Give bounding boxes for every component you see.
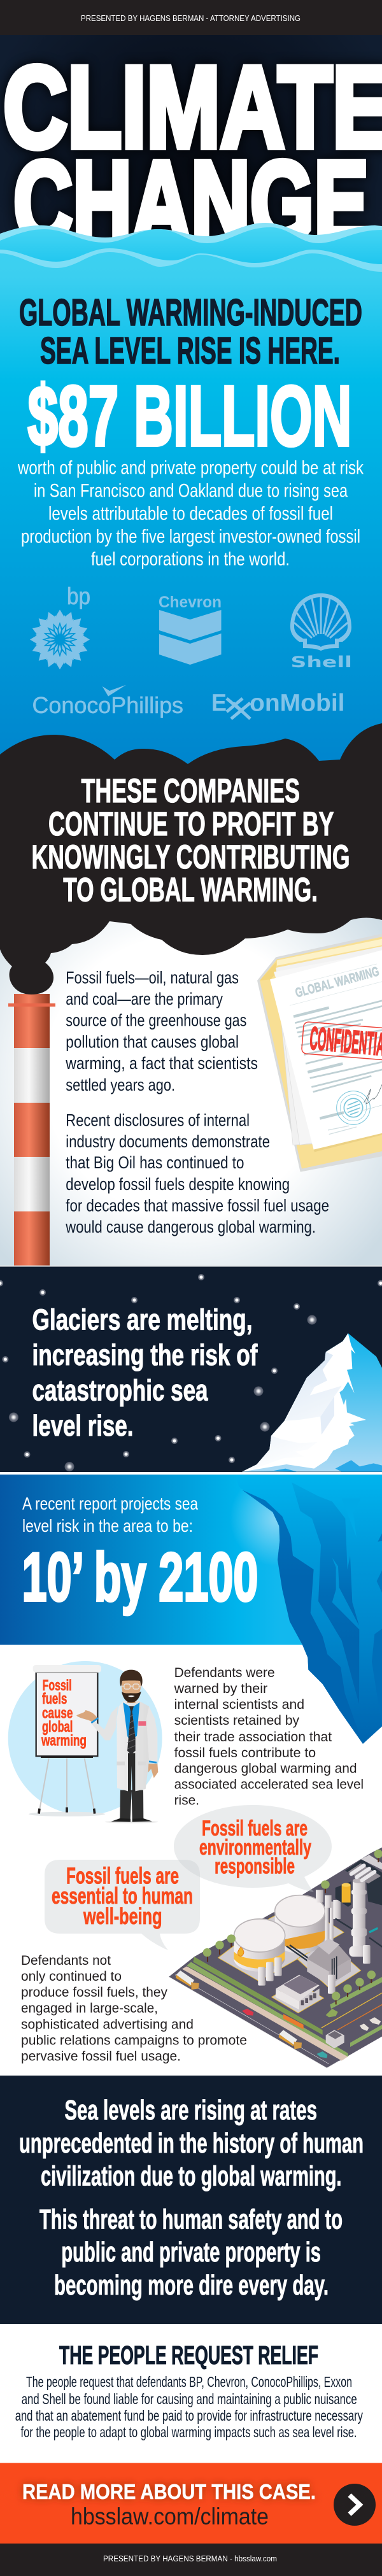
top bar text: PRESENTED BY HAGENS BERMAN - ATTORNEY ADVERTISING: [81, 13, 301, 23]
stars: [0, 1273, 382, 1472]
smoke cloud: [0, 723, 382, 994]
text block: recent disclosures: that Big Oil has continued to: [66, 1153, 244, 1172]
small silos: [258, 1945, 371, 1994]
heading shadow: READ MORE ABOUT THIS CASE.: [22, 2480, 316, 2503]
text block: fossil fuels: [65, 968, 258, 1094]
trees: [203, 1850, 382, 2009]
heading: glaciers melting: [32, 1303, 258, 1442]
heading: read more: READ MORE ABOUT THIS CASE.: [22, 2480, 316, 2503]
panel: sea levels rising: [0, 2076, 382, 2324]
text block: defendants warned: their trade association that: [174, 1730, 332, 1744]
text block: recent disclosures: for decades that massive fossil fuel usage: [66, 1196, 329, 1215]
text block: recent report: level risk in the area to be:: [22, 1516, 193, 1536]
footer: [0, 2544, 382, 2576]
scientist figure: [76, 1670, 158, 1822]
bubble text: essential to human: [52, 1883, 193, 1909]
text block: recent report: [22, 1494, 198, 1536]
document lines: [290, 964, 382, 1135]
flip chart text: fuels: [42, 1690, 67, 1708]
text block: fossil fuels: pollution that causes global: [66, 1033, 239, 1052]
speech bubble: essential to well-being: [45, 1860, 200, 1950]
logo: bp: [29, 583, 91, 670]
logo: bp: bp: [67, 583, 90, 609]
text block: defendants warned: associated accelerated sea level: [174, 1778, 364, 1792]
waves: [0, 223, 382, 770]
illustration: refinery: [169, 1846, 382, 2068]
footer text: PRESENTED BY HAGENS BERMAN - hbsslaw.com: [103, 2554, 277, 2563]
statement: threat to safety: [39, 2204, 343, 2301]
iceberg above water: [242, 1333, 382, 1472]
text block: advertising campaigns: pervasive fossil fuel usage.: [21, 2049, 181, 2064]
flip chart text: warming: [41, 1732, 87, 1750]
text block: defendants warned: rise.: [174, 1793, 199, 1808]
top bar: [0, 0, 382, 35]
text block: advertising campaigns: public relations campaigns to promote: [21, 2034, 247, 2048]
text block: advertising campaigns: only continued to: [21, 1969, 122, 1984]
heading: glaciers melting: increasing the risk of: [32, 1338, 258, 1371]
text block: advertising campaigns: engaged in large-scale,: [21, 2001, 158, 2016]
sign and gatehouse: [283, 2014, 344, 2048]
text block: recent disclosures: [65, 1110, 329, 1236]
bubble text: Fossil fuels are: [202, 1816, 308, 1841]
text block: recent disclosures: Recent disclosures of internal: [66, 1110, 250, 1129]
logo: conocophillips: ConocoPhillips: [32, 692, 183, 718]
slab under tanks: [218, 1904, 344, 1981]
text block: property at risk: fuel corporations in the world.: [91, 549, 290, 570]
text block: fossil fuels: settled years ago.: [66, 1075, 175, 1094]
text block: advertising campaigns: produce fossil fuels, they: [21, 1985, 167, 2000]
logo: exxonmobil: [211, 690, 345, 719]
text block: recent disclosures: industry documents demonstrate: [66, 1132, 270, 1151]
front storage tank: [234, 1919, 285, 1972]
panel: hero with title: [0, 0, 382, 267]
logo: exxonmobil: E: [211, 690, 227, 717]
title: climate change: [3, 42, 382, 267]
text block: defendants warned: warned by their: [174, 1681, 267, 1696]
text block: recent disclosures: develop fossil fuels despite knowing: [66, 1175, 290, 1194]
iceberg under water: [236, 1475, 382, 1744]
heading: companies profit: [32, 772, 350, 909]
heading: sea level rise: [19, 292, 362, 372]
low building: [276, 1975, 320, 2010]
title glow: [3, 42, 382, 267]
text block: defendants warned: scientists retained by: [174, 1713, 300, 1728]
bubble text: Fossil fuels are: [66, 1863, 179, 1889]
bubble text: environmentally: [199, 1836, 311, 1860]
bubble text: well-being: [83, 1903, 162, 1929]
waterline: [0, 1472, 382, 1476]
chimney: [8, 994, 55, 1266]
text block: fossil fuels: source of the greenhouse gas: [66, 1011, 246, 1030]
service road line: [337, 2004, 382, 2030]
back storage tank: [275, 1895, 325, 1953]
flip chart text: cause: [42, 1704, 73, 1722]
panel: call to action: [0, 2463, 382, 2544]
trucks: [176, 1971, 302, 2049]
road markings: [322, 1992, 382, 2028]
bubble text: responsible: [215, 1855, 295, 1879]
text block: advertising campaigns: [21, 1953, 247, 2064]
text block: defendants warned: [174, 1666, 364, 1808]
text block: defendants warned: Defendants were: [174, 1666, 275, 1680]
cars: [242, 2009, 381, 2058]
text block: fossil fuels: and coal—are the primary: [66, 989, 223, 1008]
panel: sea level projection: [0, 1475, 382, 1744]
text block: relief request: [15, 2374, 363, 2440]
flip chart text: Fossil: [43, 1677, 72, 1694]
seal and signature: [337, 1084, 382, 1124]
speech bubble: environmentally responsible: [174, 1805, 332, 1892]
flip chart: [33, 1665, 101, 1814]
illustration: confidential folder: [257, 933, 382, 1172]
text block: fossil fuels: Fossil fuels—oil, natural gas: [66, 968, 239, 987]
panel: internal documents: [0, 723, 382, 1267]
icon: arrow button: [334, 2484, 376, 2526]
logo: chevron: Chevron: [159, 593, 222, 611]
bubble text: [199, 1816, 311, 1879]
heading: glaciers melting: Glaciers are melting,: [32, 1303, 252, 1336]
text block: defendants warned: internal scientists and: [174, 1697, 304, 1712]
logo: shell: [290, 593, 352, 671]
flip chart text: global: [42, 1718, 73, 1736]
panel: rising sea: [0, 223, 382, 770]
text block: property at risk: [17, 457, 364, 570]
text block: recent report: A recent report projects sea: [22, 1494, 198, 1513]
text block: advertising campaigns: sophisticated advertising and: [21, 2017, 194, 2032]
statement: unprecedented rise: [19, 2095, 364, 2191]
text block: recent disclosures: would cause dangerous global warming.: [65, 1217, 316, 1236]
illustration: scientist and flip chart: [8, 1661, 162, 1823]
url: hbsslaw.com/climate: [71, 2503, 269, 2530]
heading: glaciers melting: level rise.: [32, 1409, 134, 1442]
flip chart text: [41, 1677, 87, 1750]
heading: glaciers melting: catastrophic sea: [32, 1374, 208, 1407]
panel: people request relief: [0, 2324, 382, 2463]
panel: glaciers: [0, 1267, 382, 1476]
text block: fossil fuels: warming, a fact that scientists: [65, 1054, 258, 1073]
hedge: [193, 1957, 323, 2035]
text block: defendants warned: fossil fuels contribute to: [174, 1746, 316, 1760]
stacks and column: [286, 1878, 382, 1961]
logo: chevron: [159, 593, 222, 665]
text block: defendants warned: dangerous global warming and: [174, 1762, 357, 1776]
pipe rack frame: [336, 1855, 382, 1907]
head: [120, 1670, 143, 1703]
stat: 10 feet by 2100: 10’ by 2100: [22, 1538, 258, 1615]
bubble text: [52, 1863, 193, 1929]
logo: shell: Shell: [290, 653, 352, 671]
furnace building: [307, 1939, 351, 1985]
logo: exxonmobil: onMobil: [250, 690, 345, 717]
text block: advertising campaigns: Defendants not: [21, 1953, 111, 1968]
